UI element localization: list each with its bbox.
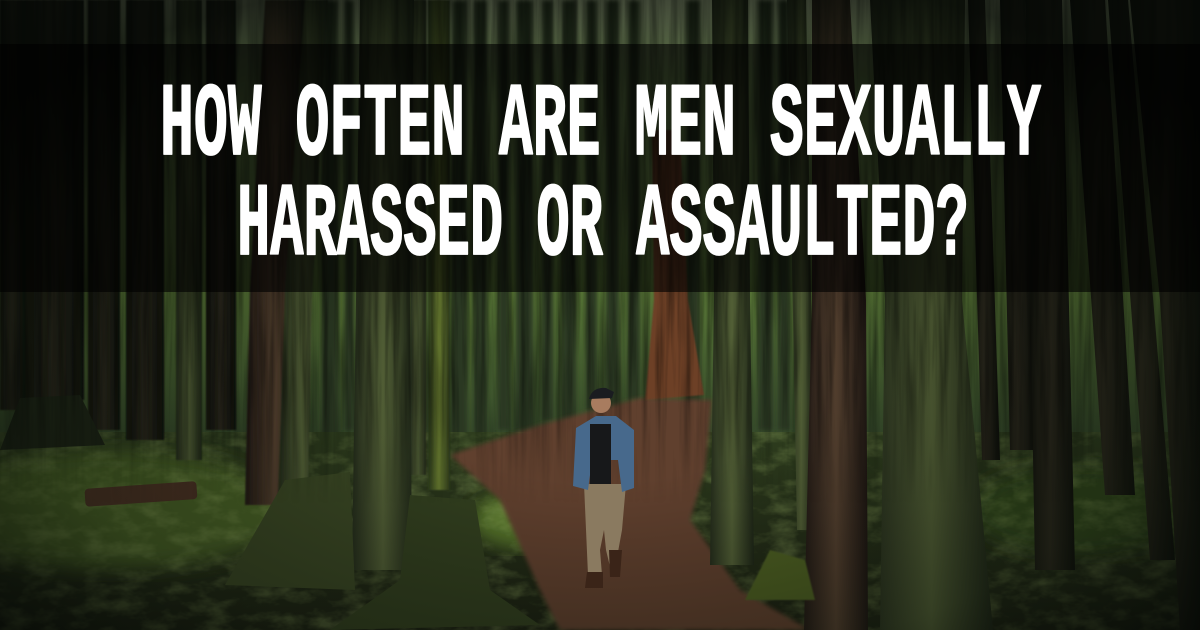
head <box>591 393 611 413</box>
legs <box>584 484 626 575</box>
mid trees, right group <box>710 0 1200 630</box>
tree stumps <box>0 395 540 630</box>
title line 2: HARASSED OR ASSAULTED? <box>237 169 969 286</box>
boots <box>585 550 622 588</box>
distant red snag <box>645 130 704 400</box>
title line 1: HOW OFTEN ARE MEN SEXUALLY <box>160 68 1042 186</box>
jacket <box>573 416 634 492</box>
shirt <box>590 424 611 484</box>
title band <box>0 44 1200 292</box>
dirt path <box>450 398 810 630</box>
foreground tree, center-left <box>352 0 414 570</box>
cap <box>589 388 614 399</box>
title <box>160 68 1042 286</box>
bark streak overlay <box>6 0 1166 474</box>
ground: forest floor <box>0 432 1200 630</box>
distant tree trunks <box>296 0 790 440</box>
mossy mound <box>745 550 815 600</box>
man walking on path <box>573 388 634 588</box>
mid trees, left group <box>0 0 450 505</box>
